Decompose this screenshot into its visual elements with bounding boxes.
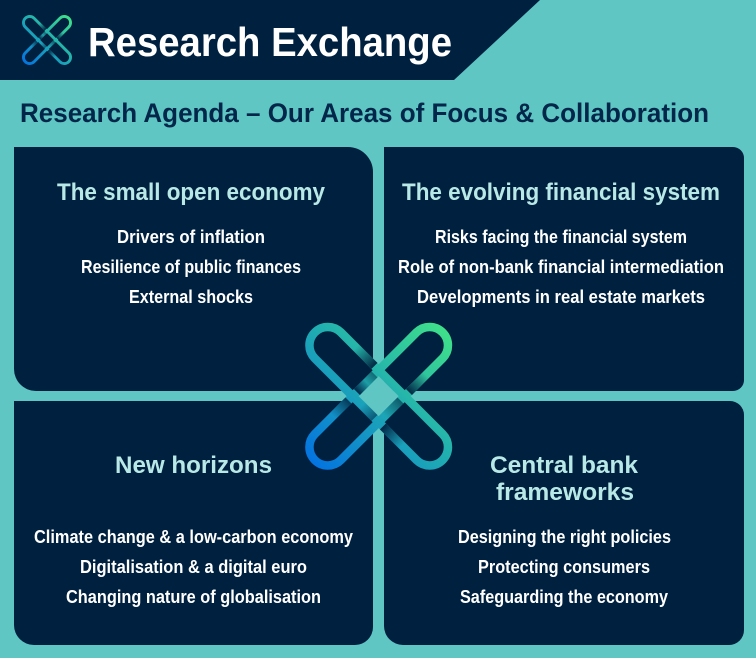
panel list: Developments in real estate markets — [417, 287, 705, 307]
panel list — [34, 527, 353, 607]
panel: new horizons — [14, 401, 373, 645]
panel list — [458, 527, 671, 607]
panel list: Designing the right policies — [458, 527, 671, 547]
panel heading: The small open economy — [57, 179, 326, 206]
panel list: Risks facing the financial system — [435, 227, 687, 247]
panel: the evolving financial system — [384, 147, 744, 391]
panel list: Drivers of inflation — [117, 227, 265, 247]
emblem crossed capsules — [309, 327, 448, 465]
panel heading: New horizons — [115, 452, 272, 479]
panel background — [14, 147, 373, 391]
panel list: Changing nature of globalisation — [66, 587, 321, 607]
panel list — [398, 227, 724, 307]
panel list: Digitalisation & a digital euro — [80, 557, 307, 577]
panel heading: The evolving financial system — [402, 179, 720, 206]
panel list: Safeguarding the economy — [460, 587, 668, 607]
icon: central X emblem — [309, 327, 448, 465]
panel heading: frameworks — [496, 479, 634, 506]
header title: Research Exchange — [88, 19, 452, 65]
panel list: Climate change & a low-carbon economy — [34, 527, 353, 547]
panel list: Protecting consumers — [478, 557, 650, 577]
panel background — [384, 401, 744, 645]
panel list: Role of non-bank financial intermediation — [398, 257, 724, 277]
panel: central bank frameworks — [384, 401, 744, 645]
emblem centre diamond — [358, 376, 399, 416]
panel background — [14, 401, 373, 645]
banner shape — [0, 0, 540, 80]
panel heading: Central bank — [490, 452, 639, 479]
panel list: External shocks — [129, 287, 253, 307]
panel list: Resilience of public finances — [81, 257, 301, 277]
panel: the small open economy — [14, 147, 373, 391]
icon: header logo — [23, 16, 71, 64]
panel heading — [490, 452, 639, 506]
subtitle heading: Research Agenda – Our Areas of Focus & Collaboration — [20, 98, 709, 128]
panel background — [384, 147, 744, 391]
header banner — [0, 0, 540, 80]
panel list — [81, 227, 301, 307]
